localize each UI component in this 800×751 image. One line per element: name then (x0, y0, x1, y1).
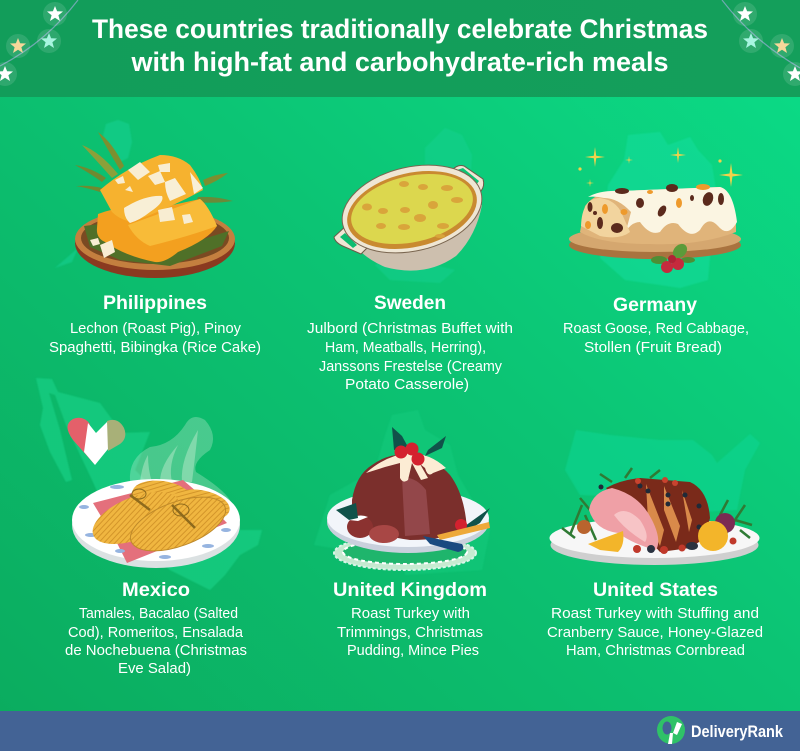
icon: logo (657, 716, 685, 744)
steam (130, 417, 230, 500)
food: Christmas pudding (327, 427, 490, 570)
heading: Germany: Germany (613, 294, 697, 316)
text: Mexico dishes: Cod), Romeritos, Ensalada (68, 625, 244, 641)
holly (336, 427, 490, 530)
text: Germany dishes: Roast Goose, Red Cabbage, (563, 321, 749, 337)
heading: Mexico: Mexico (122, 579, 190, 601)
footer band (0, 711, 800, 751)
text: Philippines dishes (49, 321, 261, 356)
garland: left (0, 0, 78, 86)
panel: Mexico (36, 378, 262, 590)
text: Mexico dishes: de Nochebuena (Christmas (65, 643, 247, 659)
heading: United Kingdom: United Kingdom (333, 579, 487, 601)
heading: United States: United States (593, 579, 718, 601)
panel: United Kingdom (314, 410, 490, 575)
logo: DeliveryRank (657, 716, 784, 744)
heading: Sweden: Sweden (374, 292, 446, 314)
header band (0, 0, 800, 97)
map: Sweden (375, 128, 472, 283)
text: United Kingdom dishes: Trimmings, Christmas (337, 625, 483, 641)
title: These countries traditionally celebrate Christmas (92, 14, 708, 44)
text: Sweden dishes: Janssons Frestelse (Creamy (319, 359, 503, 375)
icon: Mexican flag heart (68, 418, 125, 465)
title (92, 14, 708, 77)
text: Sweden dishes: Ham, Meatballs, Herring), (325, 340, 486, 356)
text: United States dishes: Cranberry Sauce, Honey-Glazed (547, 625, 763, 641)
map: United States (565, 430, 760, 512)
text: Sweden dishes (307, 321, 513, 393)
text: Philippines dishes: Lechon (Roast Pig), Pinoy (70, 321, 242, 337)
text: Mexico dishes: Tamales, Bacalao (Salted (79, 606, 238, 622)
food: bibingka (75, 132, 235, 278)
text: Mexico dishes (65, 606, 247, 677)
icon: holly and berries (651, 241, 695, 273)
panel: Philippines (55, 120, 235, 278)
text: Sweden dishes: Potato Casserole) (345, 377, 469, 393)
map: United Kingdom (314, 410, 490, 575)
title: with high-fat and carbohydrate-rich meals (131, 47, 668, 77)
text: Mexico dishes: Eve Salad) (118, 661, 191, 677)
garland: right (722, 0, 800, 86)
text: United States dishes: Ham, Christmas Cornbread (566, 643, 745, 659)
panel: Sweden (333, 128, 491, 283)
text: Philippines dishes: Spaghetti, Bibingka (Rice Cake) (49, 340, 261, 356)
text: Sweden dishes: Julbord (Christmas Buffet with (307, 321, 513, 337)
text: United States dishes: Roast Turkey with Stuffing and (551, 606, 759, 622)
logo: DeliveryRank: DeliveryRank (691, 723, 784, 741)
food: casserole (333, 152, 491, 271)
text: Germany dishes: Stollen (Fruit Bread) (584, 340, 722, 356)
food: tamales plate (72, 477, 240, 568)
map: Germany (600, 132, 716, 288)
panel: United States (550, 430, 760, 565)
text: United Kingdom dishes: Roast Turkey with (351, 606, 470, 622)
map: Philippines (55, 120, 132, 268)
text: United Kingdom dishes (337, 606, 483, 659)
spoon (437, 522, 490, 540)
food: stollen (569, 184, 741, 273)
text: United Kingdom dishes: Pudding, Mince Pies (347, 643, 479, 659)
text: Germany dishes (563, 321, 749, 356)
food: glazed ham platter (550, 468, 760, 565)
text: United States dishes (547, 606, 763, 659)
heading: Philippines: Philippines (103, 292, 207, 314)
icon: sparkles (578, 147, 743, 187)
map: Mexico (36, 378, 262, 590)
